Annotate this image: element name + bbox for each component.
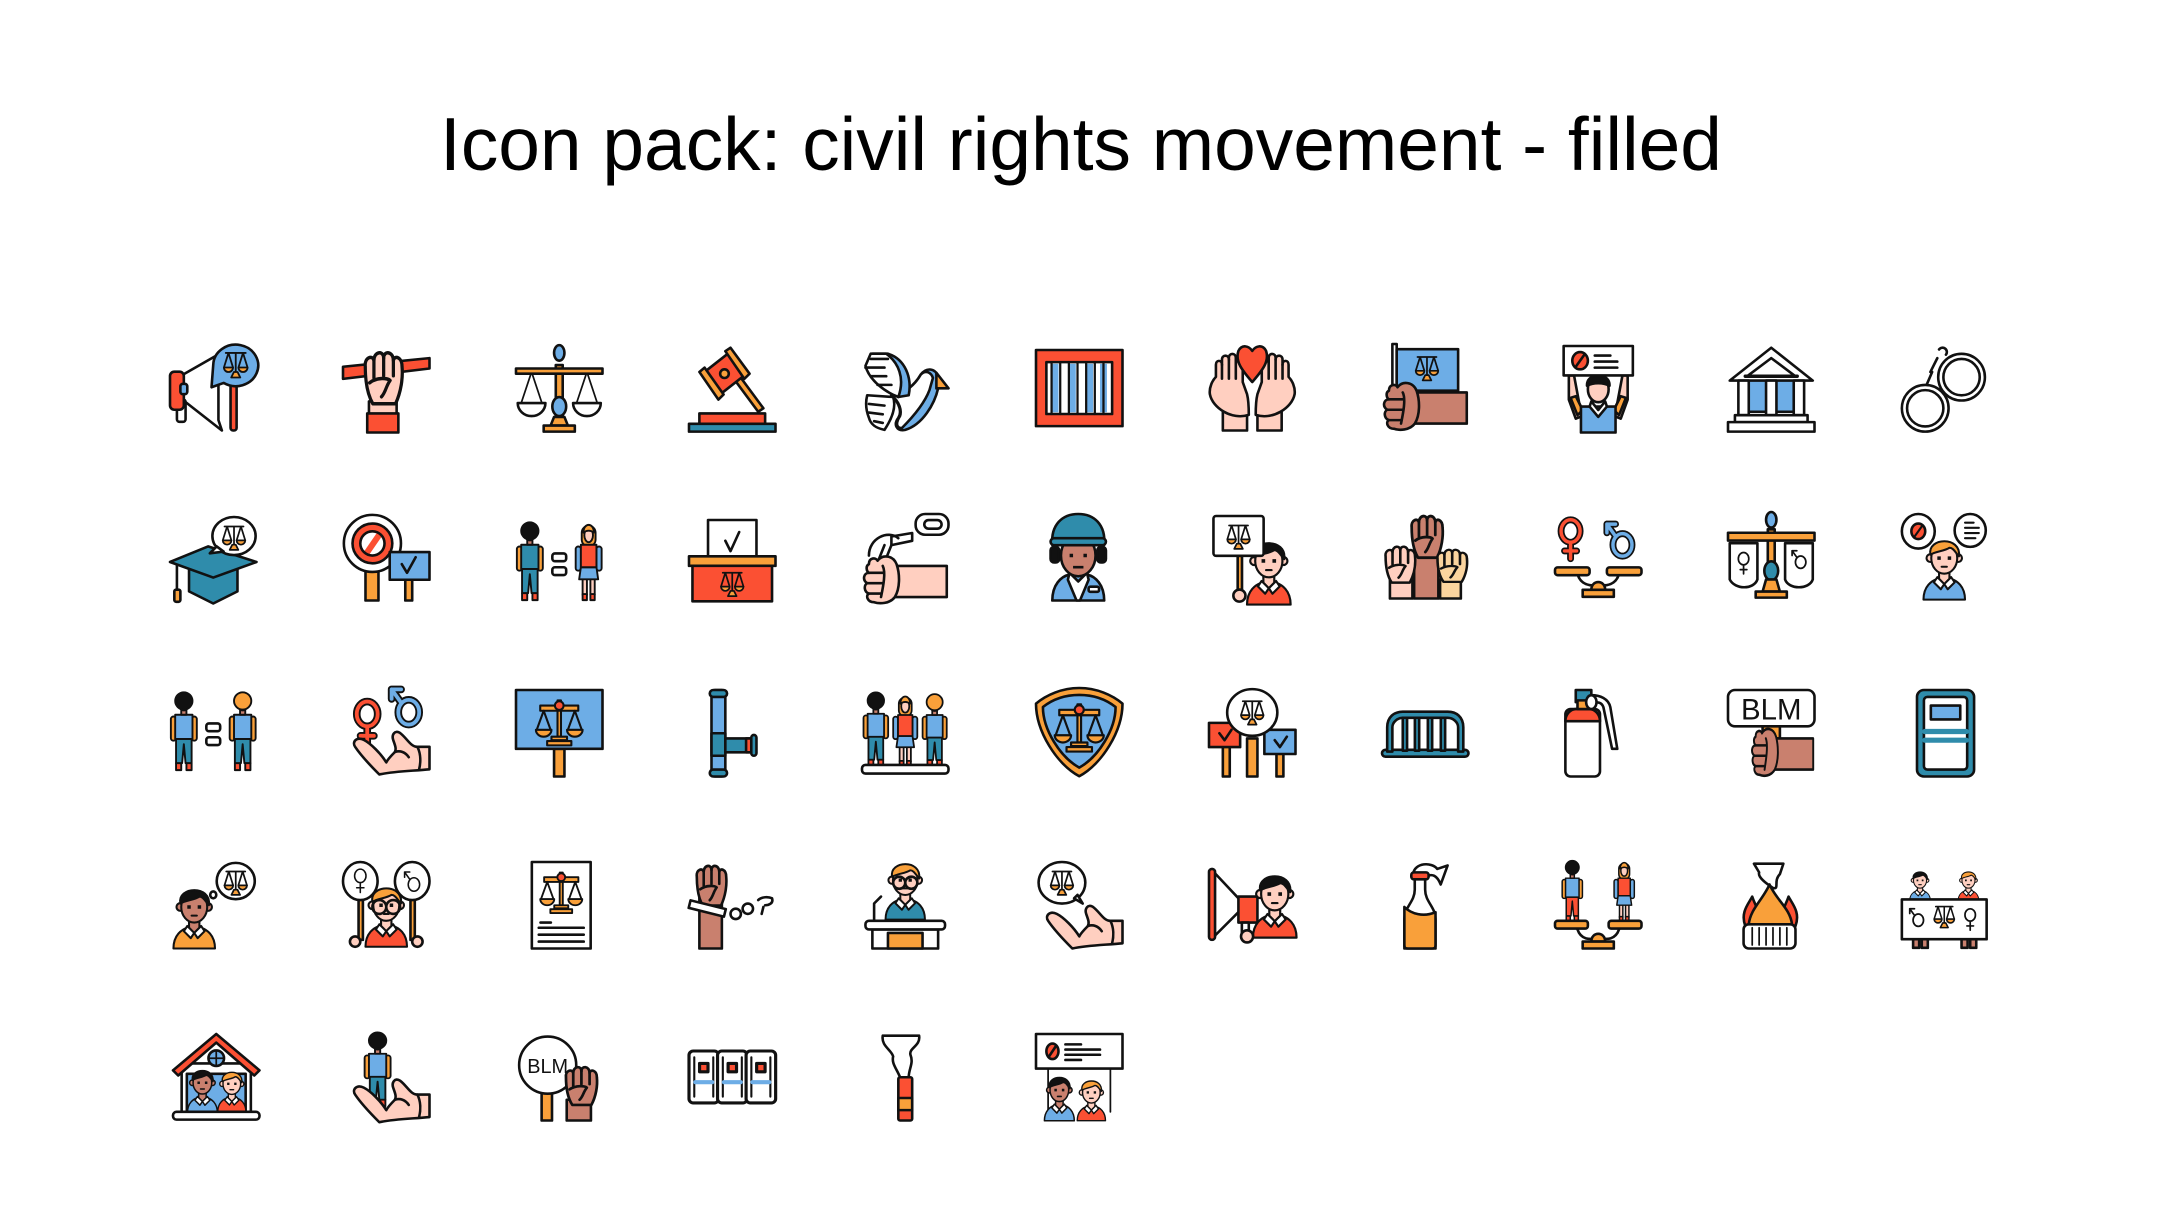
icon: flag with scales held in fist: [1384, 344, 1467, 430]
icon: hand holding person: [354, 1032, 430, 1122]
icon: graduation cap with justice bubble: [170, 517, 256, 604]
icon: courthouse: [1728, 348, 1814, 432]
icon: gavel and sound block: [689, 348, 776, 432]
icon: two men equal: [171, 692, 256, 770]
icon: hand with gender symbols: [354, 689, 430, 774]
icon: peace dove: [865, 354, 948, 430]
icon: riot police officer: [1051, 514, 1106, 600]
icon: BLM sign and fist: BLM: [527, 1056, 568, 1078]
icon: open hands holding heart: [1210, 346, 1295, 430]
icon: man equals woman: [517, 522, 602, 600]
icon: three raised fists: [1386, 516, 1467, 598]
icon: megaphone with justice speech bubble: [170, 345, 258, 430]
icon: prohibition sign and approval placard: [344, 515, 430, 600]
icon: gender symbols on balance: [1555, 520, 1642, 597]
icon: scales with gender symbols: [1728, 512, 1814, 598]
icon: crowd control barrier: [1382, 712, 1468, 757]
icon: placard with scales: [516, 690, 602, 776]
icon row 2: [170, 512, 1986, 605]
icon: prison bars window: [1036, 350, 1122, 426]
icon: two people with banner: [1902, 872, 1987, 948]
icon: protester holding sign overhead: [1564, 346, 1633, 432]
icon: family at home: [173, 1034, 260, 1120]
icon: raised fist holding stick: [343, 353, 430, 432]
icon: three people on platform: [862, 692, 948, 774]
icon: justice shield: [1036, 688, 1122, 776]
icon: protesters under banner: [1036, 1034, 1122, 1121]
icon: man with gender signs: [343, 862, 430, 947]
icon: flare with smoke: [883, 1036, 919, 1120]
icon row 4: [173, 861, 1987, 948]
icon row 3: [171, 688, 1974, 776]
icon: fist breaking chains: [689, 866, 772, 948]
icon: man thinking of justice: [173, 863, 255, 948]
icon: two people on balance: [1555, 861, 1642, 948]
icon row 5: [173, 1032, 1122, 1122]
icon: man with two thought bubbles: [1902, 514, 1986, 600]
icon: legal document: [532, 862, 591, 948]
icon: bottle with liquid: [1404, 864, 1448, 948]
icon: hand breaking chain: [864, 514, 948, 603]
icon: row of riot shields: [689, 1051, 776, 1103]
icon: police baton: [710, 690, 756, 776]
icon: man holding scales placard: [1213, 516, 1291, 605]
icon: protest placards with scales: [1209, 689, 1296, 776]
icon: man with megaphone: [1209, 869, 1297, 942]
icon: burning container: [1744, 864, 1797, 948]
title: Icon pack: civil rights movement - filled: [440, 102, 1722, 186]
icon: BLM sign and fist: [519, 1037, 597, 1120]
icon: BLM sign held by fist: [1728, 690, 1814, 776]
icon: speaker at podium: [865, 864, 945, 948]
icon: BLM sign held by fist: BLM: [1741, 693, 1801, 726]
icon: handcuffs: [1902, 348, 1985, 432]
icon: gas canister: [1565, 690, 1617, 776]
icon: balance scales: [516, 345, 602, 432]
icon row 1: [170, 344, 1985, 432]
icon: hand with justice bubble: [1039, 862, 1122, 948]
icon: ballot box with scales: [689, 520, 776, 601]
icon: riot shield: [1917, 690, 1974, 776]
